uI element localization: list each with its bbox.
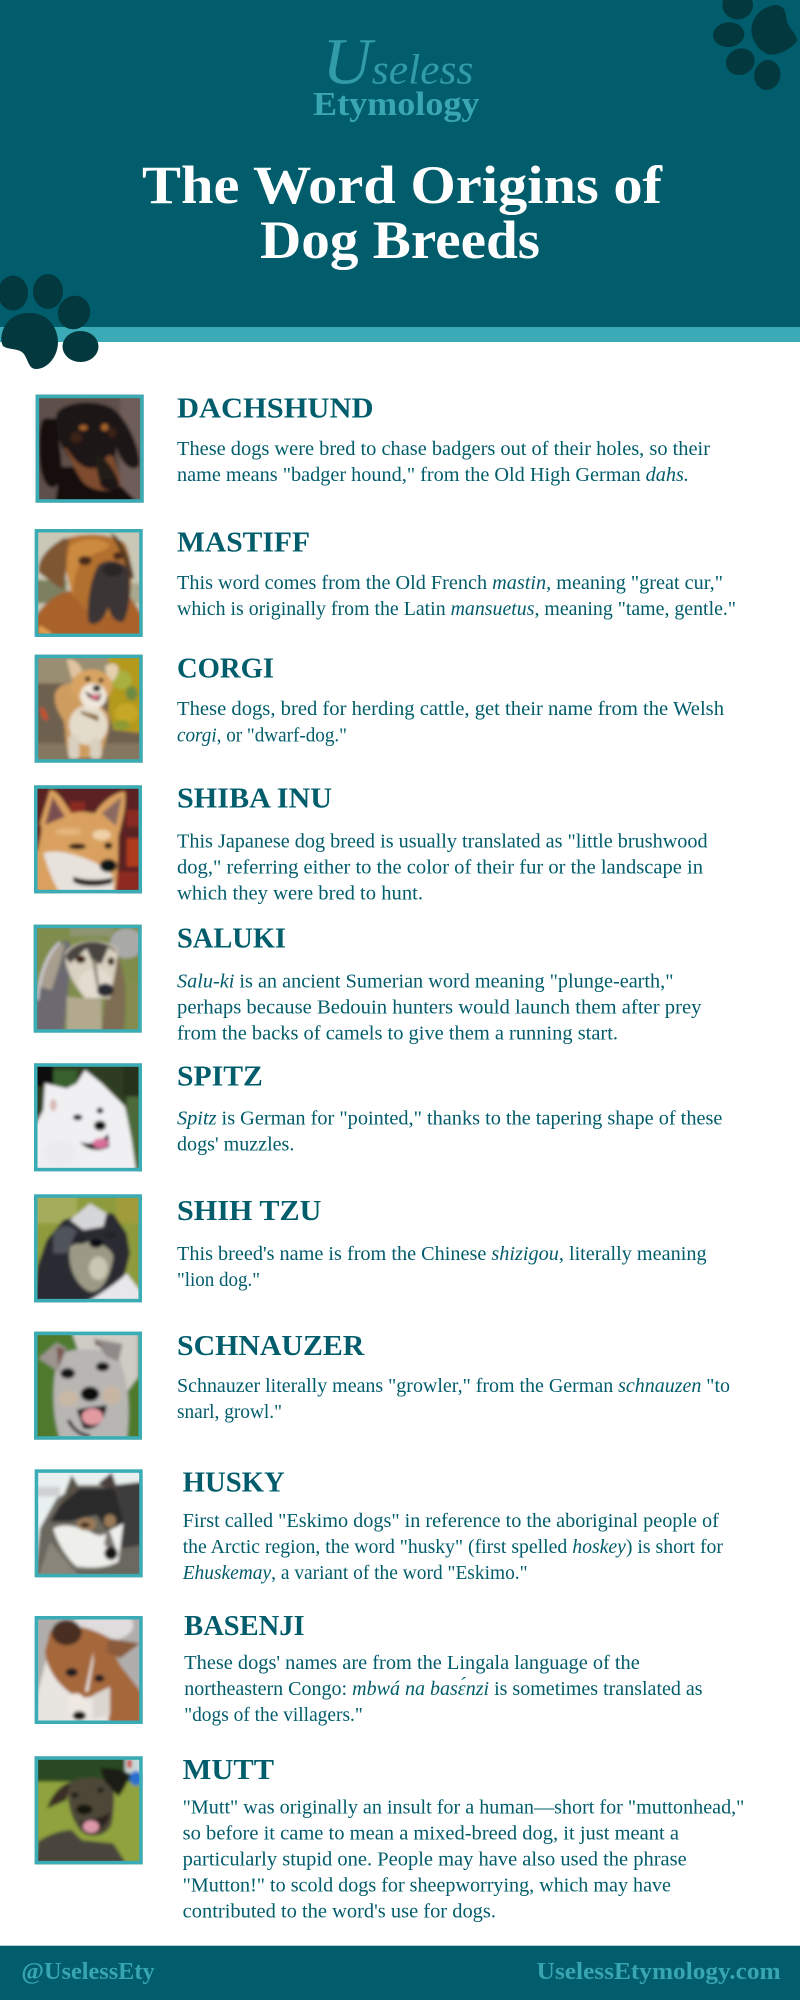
title: Dog Breeds xyxy=(260,210,540,270)
description: corgi: corgi, or "dwarf-dog." xyxy=(177,725,347,747)
heading: shiba inu: SHIBA INU xyxy=(177,784,332,815)
photo: spitz xyxy=(30,1060,150,1173)
description: mutt: so before it came to mean a mixed-breed dog, it just meant a xyxy=(183,1822,679,1844)
heading: spitz: SPITZ xyxy=(177,1062,263,1093)
icon: paw print left xyxy=(0,274,98,369)
title: The Word Origins of xyxy=(142,155,663,215)
description: schnauzer xyxy=(177,1375,730,1423)
description: corgi: These dogs, bred for herding cattle, get their name from the Welsh xyxy=(177,698,724,720)
heading: schnauzer: SCHNAUZER xyxy=(177,1331,365,1362)
photo: shiba inu xyxy=(30,783,150,897)
heading: saluki: SALUKI xyxy=(177,924,286,955)
description: saluki xyxy=(177,970,702,1044)
heading: mastiff: MASTIFF xyxy=(177,528,310,559)
description: mastiff: This word comes from the Old French mastin, meaning "great cur," xyxy=(177,572,723,594)
photo: mutt xyxy=(30,1750,150,1870)
heading: basenji: BASENJI xyxy=(184,1611,305,1642)
entry: spitz xyxy=(30,1060,723,1173)
description: mutt: particularly stupid one. People may have also used the phrase xyxy=(183,1848,687,1870)
description: spitz: dogs' muzzles. xyxy=(177,1133,294,1155)
heading: corgi: CORGI xyxy=(177,653,274,684)
description: shiba inu: which they were bred to hunt. xyxy=(177,882,423,904)
description: shiba inu: dog," referring either to the color of their fur or the landscape in xyxy=(177,856,703,878)
description: mutt: contributed to the word's use for dogs. xyxy=(183,1900,496,1922)
description: saluki: perhaps because Bedouin hunters would launch them after prey xyxy=(177,996,702,1018)
description: shiba inu: This Japanese dog breed is usually translated as "little brushwood xyxy=(177,830,708,852)
photo: saluki xyxy=(30,920,150,1040)
heading: dachshund: DACHSHUND xyxy=(177,394,374,425)
description: husky: Ehuskemay, a variant of the word "Eskimo." xyxy=(182,1562,528,1584)
photo: basenji xyxy=(30,1608,150,1725)
entry: dachshund xyxy=(30,390,710,510)
title xyxy=(142,155,663,270)
description: schnauzer: snarl, growl." xyxy=(177,1401,282,1423)
description: corgi xyxy=(177,698,724,747)
description: shiba inu xyxy=(177,830,708,904)
description: mastiff: which is originally from the Latin mansuetus, meaning "tame, gentle." xyxy=(177,598,736,620)
description: mutt xyxy=(183,1796,744,1922)
description: shih tzu xyxy=(177,1243,707,1291)
photo: husky xyxy=(30,1465,150,1585)
footer: twitter handle: @UselessEty xyxy=(21,1959,155,1985)
description: mutt: "Mutton!" to scold dogs for sheepworrying, which may have xyxy=(183,1874,671,1896)
photo: corgi xyxy=(30,650,150,770)
entry: husky xyxy=(30,1465,723,1585)
header panel xyxy=(0,0,800,369)
photo: dachshund xyxy=(30,390,150,510)
footer: website: UselessEtymology.com xyxy=(537,1959,781,1985)
entry: mastiff xyxy=(30,523,736,643)
heading: husky: HUSKY xyxy=(183,1468,285,1499)
description: basenji: "dogs of the villagers." xyxy=(184,1704,363,1726)
photo: schnauzer xyxy=(30,1330,150,1443)
entry: corgi xyxy=(30,650,724,770)
description: shih tzu: "lion dog." xyxy=(177,1269,260,1291)
photo: shih tzu xyxy=(30,1190,150,1310)
heading: mutt: MUTT xyxy=(183,1755,274,1786)
description: basenji: northeastern Congo: mbwá na basɛ́nzi is sometimes translated as xyxy=(184,1676,703,1700)
description: mutt: "Mutt" was originally an insult for a human—short for "muttonhead," xyxy=(183,1796,744,1818)
entry: mutt xyxy=(30,1750,744,1922)
description: husky: the Arctic region, the word "husky" (first spelled hoskey) is short for xyxy=(183,1536,723,1558)
logo xyxy=(313,25,480,123)
description: basenji xyxy=(184,1652,703,1726)
description: dachshund: These dogs were bred to chase badgers out of their holes, so their xyxy=(177,438,710,460)
entry: schnauzer xyxy=(30,1330,730,1443)
heading: shih tzu: SHIH TZU xyxy=(177,1196,321,1227)
description: husky xyxy=(182,1510,723,1584)
description: shih tzu: This breed's name is from the Chinese shizigou, literally meaning xyxy=(177,1243,707,1265)
description: saluki: Salu-ki is an ancient Sumerian word meaning "plunge-earth," xyxy=(177,970,674,992)
photo: mastiff xyxy=(30,523,150,643)
description: mastiff xyxy=(177,572,736,620)
description: dachshund xyxy=(177,438,710,486)
logo: Etymology xyxy=(313,86,480,123)
entry: saluki xyxy=(30,920,701,1044)
entry: basenji xyxy=(30,1608,703,1726)
description: basenji: These dogs' names are from the Lingala language of the xyxy=(184,1652,640,1674)
description: dachshund: name means "badger hound," from the Old High German dahs. xyxy=(177,464,689,486)
description: saluki: from the backs of camels to give them a running start. xyxy=(177,1022,618,1044)
logo: Useless xyxy=(322,25,473,98)
description: schnauzer: Schnauzer literally means "growler," from the German schnauzen "to xyxy=(177,1375,730,1397)
icon: paw print top right xyxy=(712,0,797,92)
description: spitz: Spitz is German for "pointed," thanks to the tapering shape of these xyxy=(177,1107,723,1129)
description: husky: First called "Eskimo dogs" in reference to the aboriginal people of xyxy=(183,1510,719,1532)
footer panel xyxy=(0,1946,800,2000)
entry: shiba inu xyxy=(30,783,708,904)
entry: shih tzu xyxy=(30,1190,707,1310)
description: spitz xyxy=(177,1107,723,1155)
